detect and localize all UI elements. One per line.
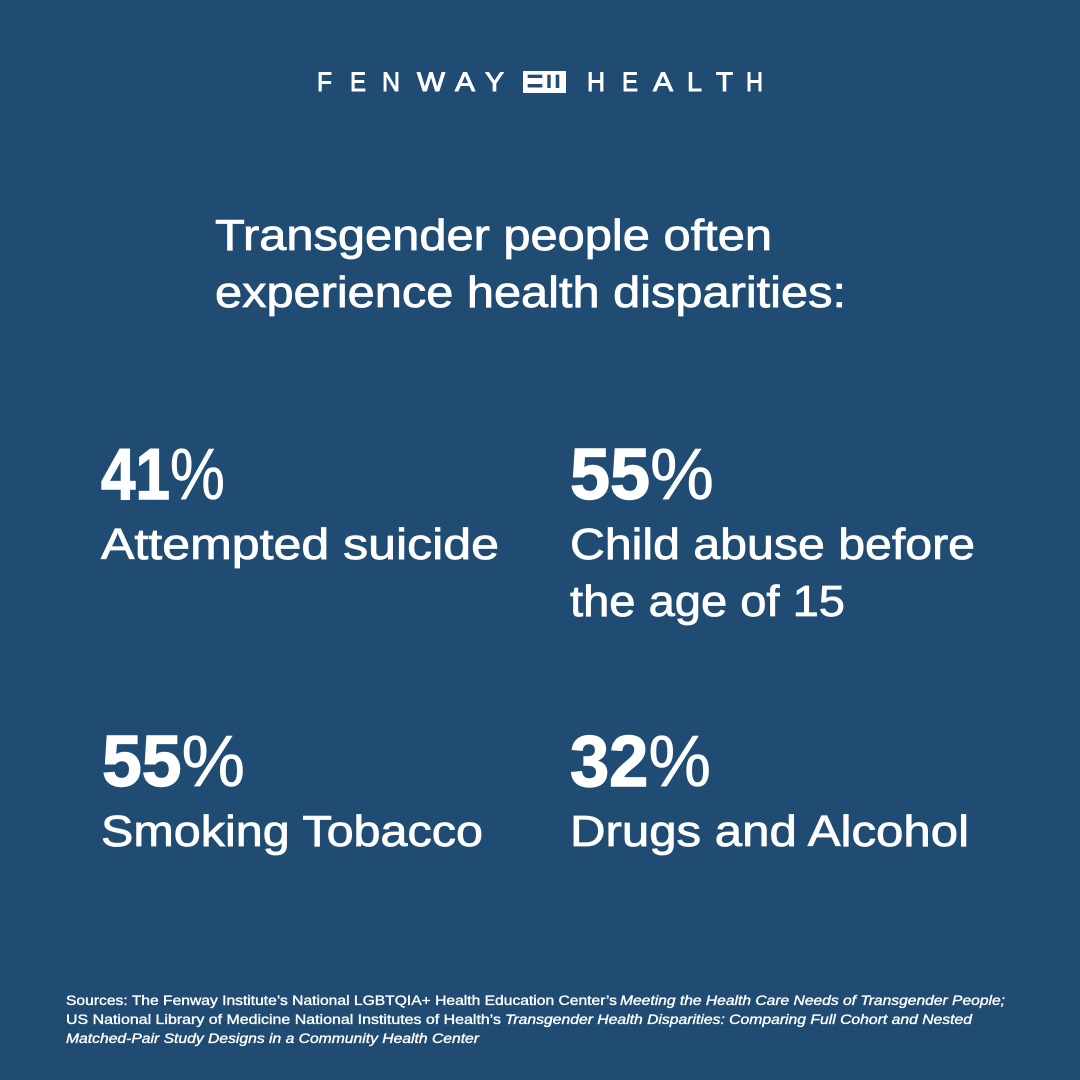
logo wordmark: Fenway: E <box>350 67 366 97</box>
heading: experience health disparities: <box>215 268 846 317</box>
stat: 55% smoking tobacco <box>101 722 483 856</box>
sources: Transgender Health Disparities: Comparing Full Cohort and Nested <box>505 1012 973 1027</box>
logo wordmark: Fenway: N <box>382 67 400 97</box>
stat: 32% drugs and alcohol <box>570 722 969 856</box>
logo: Fenway Health <box>317 67 763 97</box>
sources: US National Library of Medicine National Institutes of Health’s <box>66 1012 501 1027</box>
logo wordmark: Fenway: A <box>455 67 475 97</box>
stat: 55% smoking tobacco: 55% <box>102 722 245 802</box>
heading <box>215 211 846 317</box>
stat: 32% drugs and alcohol: Drugs and Alcohol <box>570 807 969 856</box>
stat: 55% child abuse: the age of 15 <box>570 577 845 626</box>
logo wordmark: Health: H <box>587 67 605 97</box>
logo wordmark: Fenway: F <box>317 67 332 97</box>
sources: Meeting the Health Care Needs of Transgender People; <box>620 993 1005 1008</box>
logo wordmark: Fenway <box>317 67 504 97</box>
stat: 41% attempted suicide: 41% <box>101 435 225 515</box>
stat: 55% child abuse <box>570 435 975 626</box>
logo wordmark: Fenway: W <box>417 67 446 97</box>
stat: 55% smoking tobacco: Smoking Tobacco <box>101 807 483 856</box>
sources: Matched-Pair Study Designs in a Community Health Center <box>66 1031 480 1046</box>
sources: Sources: The Fenway Institute’s National LGBTQIA+ Health Education Center’s <box>66 993 617 1008</box>
logo wordmark: Fenway: Y <box>485 67 504 97</box>
stat: 41% attempted suicide <box>101 435 499 569</box>
heading: Transgender people often <box>215 211 772 260</box>
stat: 32% drugs and alcohol: 32% <box>570 722 711 802</box>
stat: 55% child abuse: Child abuse before <box>570 520 975 569</box>
icon: Fenway logo mark <box>523 71 566 93</box>
logo wordmark: Health: E <box>622 67 638 97</box>
logo wordmark: Health: A <box>653 67 673 97</box>
stat: 55% child abuse: 55% <box>570 435 714 515</box>
logo wordmark: Health: H <box>746 67 763 97</box>
sources <box>66 993 1005 1046</box>
stat: 41% attempted suicide: Attempted suicide <box>101 520 499 569</box>
logo wordmark: Health: L <box>687 67 702 97</box>
logo wordmark: Health: T <box>716 67 733 97</box>
logo wordmark: Health <box>587 67 763 97</box>
